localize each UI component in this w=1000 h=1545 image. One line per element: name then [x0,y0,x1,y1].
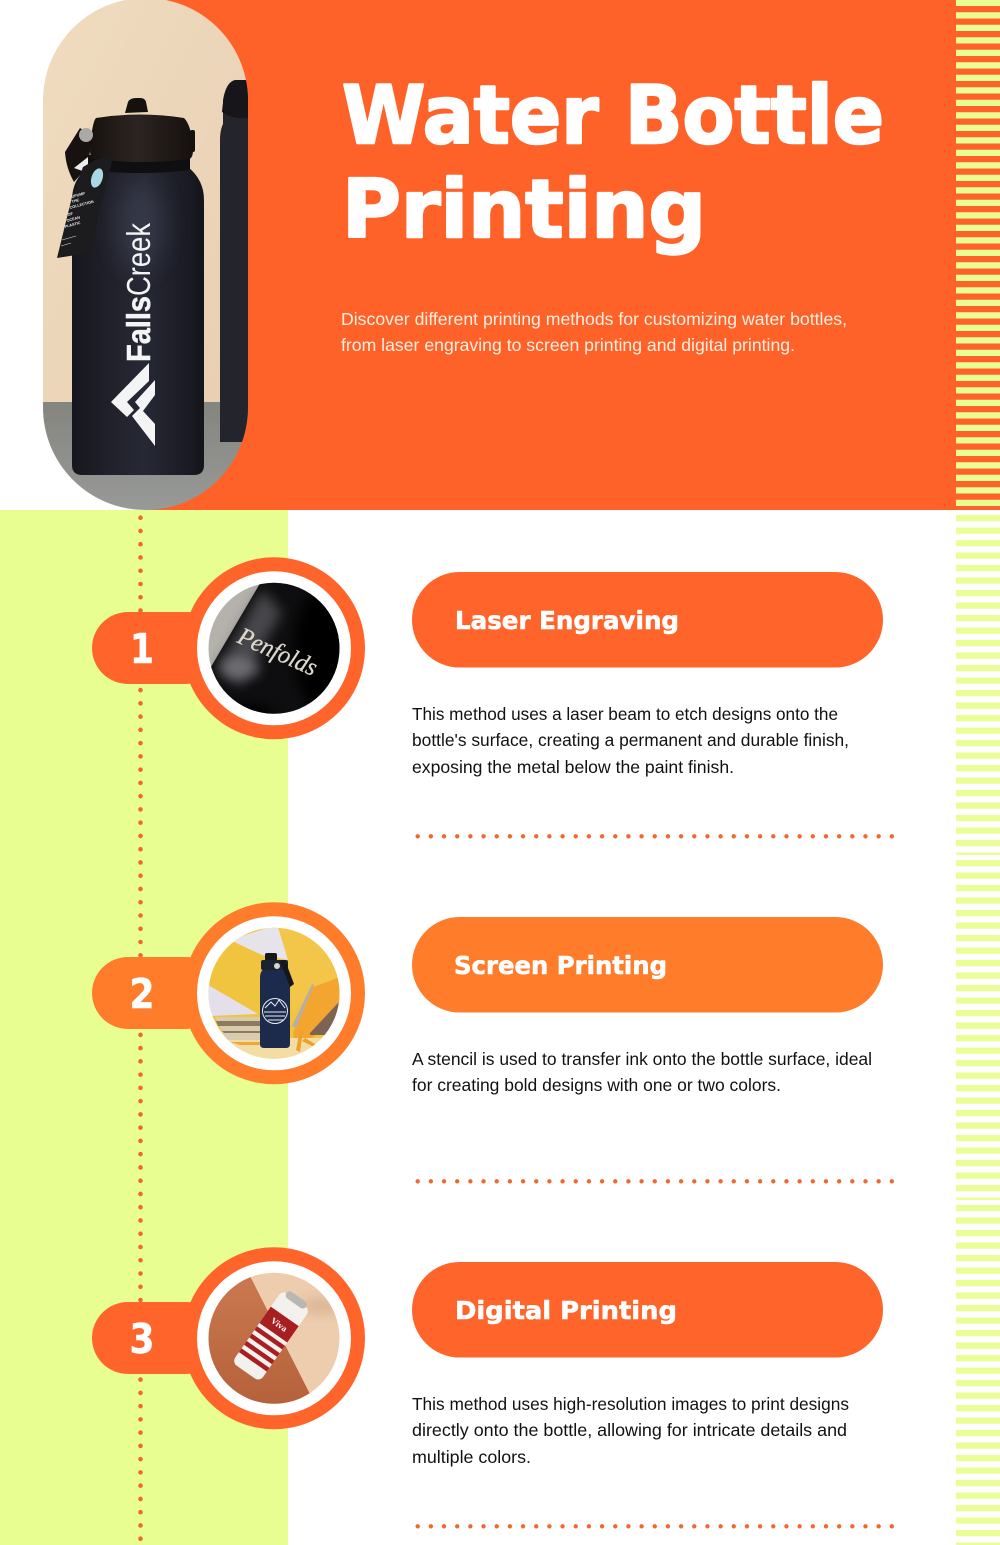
hang tag: PLASTIC [64,221,81,229]
header photo: black water bottle [43,0,248,512]
description: Digital Printing [412,1394,849,1467]
title: Water Bottle [342,69,884,162]
number 2: 2 [130,970,154,1018]
subtitle: from laser engraving to screen printing and digital printing. [341,335,795,355]
description: Digital Printing: multiple colors. [412,1447,531,1467]
subtitle [341,309,847,355]
second bottle [220,80,248,442]
bottle wordmark [126,222,150,360]
bottle wordmark: Falls [120,296,157,362]
photo: navy bottle and yellow papers [208,928,340,1059]
step 1 badge [92,557,365,739]
stripes: header [956,0,1000,510]
description: Screen Printing: A stencil is used to transfer ink onto the bottle surface, ideal [412,1049,872,1069]
hang tag: OF [67,212,74,217]
number 1: 1 [130,625,154,673]
number 3: 3 [130,1315,154,1363]
title: Printing [342,163,706,256]
title [342,69,884,256]
hang tag [57,155,114,258]
heading pill: Screen Printing: Screen Printing [454,951,667,980]
dotted timeline [138,518,143,1545]
description: Screen Printing [412,1049,872,1095]
heading pill: Laser Engraving [412,572,883,668]
subtitle: Discover different printing methods for customizing water bottles, [341,309,847,329]
panel: lime column [0,510,288,1545]
navy bottle [260,953,294,1048]
heading pill: Digital Printing [412,1262,883,1358]
description: Laser Engraving [412,704,849,777]
hang tag: COLLECTION [69,200,94,210]
description: Digital Printing: directly onto the bottle, allowing for intricate details and [412,1420,847,1440]
heading pill: Screen Printing [412,917,883,1012]
description: Laser Engraving: bottle's surface, creating a permanent and durable finish, [412,730,849,750]
photo: engraved bottle: Penfolds [233,622,321,682]
main bottle [57,98,204,475]
bottle wordmark: Creek [120,223,157,296]
description: Digital Printing: This method uses high-resolution images to print designs [412,1394,849,1414]
step 2 badge [92,902,365,1084]
step 3 badge [92,1247,365,1429]
description: Laser Engraving: exposing the metal below the paint finish. [412,757,734,777]
hang tag: UPUMP [71,191,86,199]
hang tag: THE [71,198,80,204]
hang tag: OCEAN [66,215,81,223]
photo: engraved bottle [208,582,340,714]
photo: striped bottle [208,1272,340,1404]
stripes: right column [956,515,1000,1545]
bottle logo [111,363,155,446]
photo: striped bottle: Viva [269,1315,290,1334]
description: Screen Printing: for creating bold designs with one or two colors. [412,1075,781,1095]
description: Laser Engraving: This method uses a laser beam to etch designs onto the [412,704,838,724]
panel: header orange band [146,0,1000,510]
heading pill: Laser Engraving: Laser Engraving [455,606,679,635]
heading pill: Digital Printing: Digital Printing [455,1296,677,1325]
